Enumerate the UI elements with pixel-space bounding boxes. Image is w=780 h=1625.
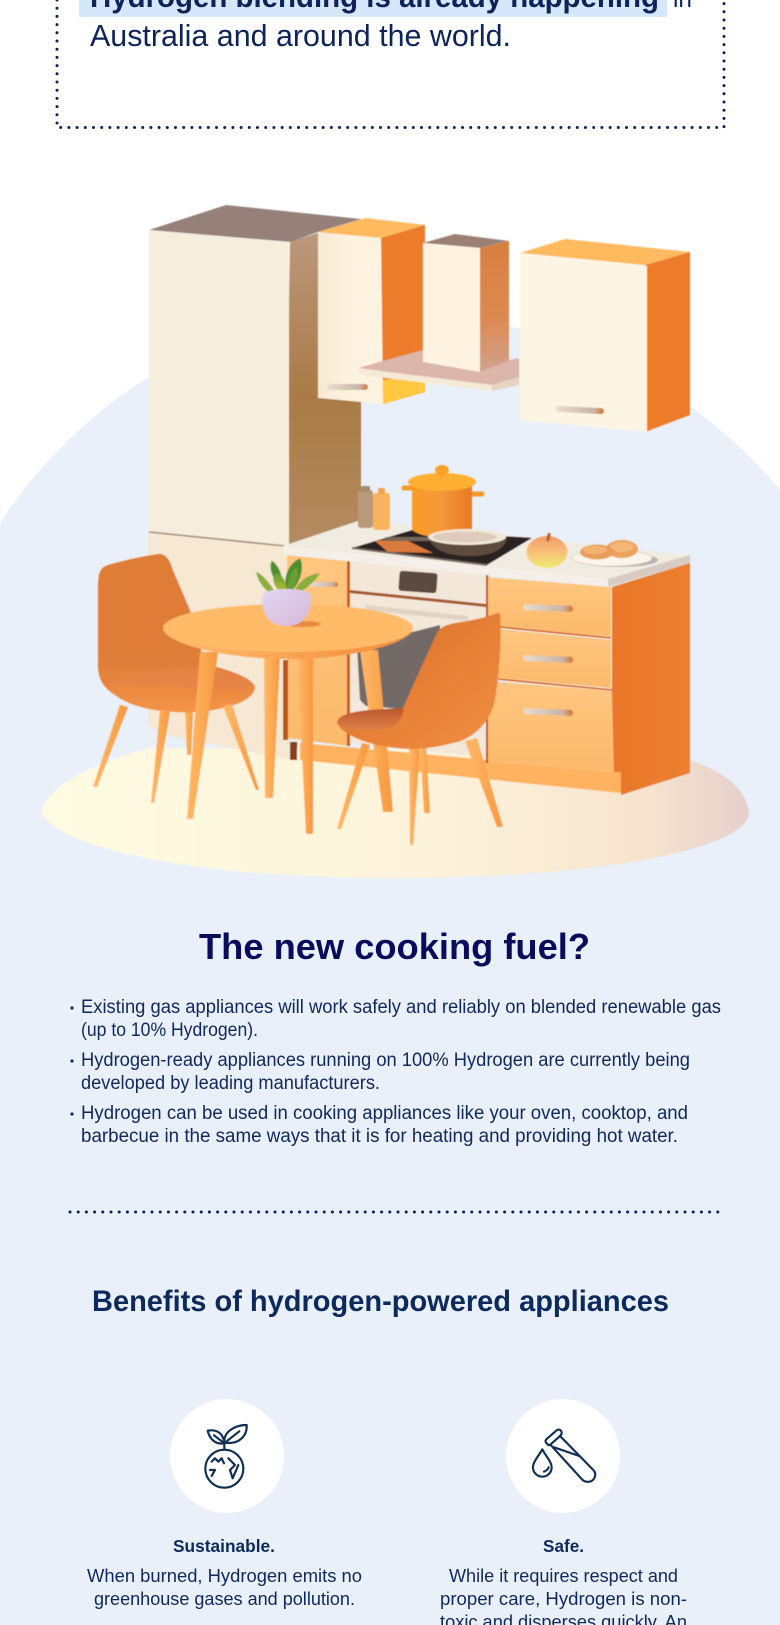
range hood [358, 234, 519, 391]
floor platform [41, 748, 749, 878]
bullet 1 [70, 997, 721, 1041]
bullet 2: Hydrogen-ready appliances running on 100% Hydrogen are currently being [81, 1050, 690, 1071]
left chair rear leg [185, 710, 193, 755]
fridge side [285, 219, 361, 546]
icon: sustainable plant and globe [170, 1399, 284, 1513]
salt and pepper shakers [358, 486, 390, 530]
kick base [300, 743, 621, 793]
bullet 2 [70, 1050, 690, 1094]
fridge lower section [148, 533, 292, 760]
bullet 3: barbecue in the same ways that it is for heating and providing hot water. [81, 1126, 678, 1147]
fridge upper door [149, 230, 289, 546]
left chair legs [93, 704, 259, 803]
text: safe: While it requires respect and [449, 1565, 678, 1586]
plate with buns [572, 540, 658, 567]
wall cabinet left [318, 218, 425, 404]
drawers [488, 577, 614, 773]
fridge top [149, 205, 361, 242]
left small cabinet [283, 552, 350, 760]
potted plant [256, 558, 321, 627]
base cabinet side [612, 563, 690, 795]
bullet 1: Existing gas appliances will work safely and reliably on blended renewable gas [81, 997, 721, 1018]
wall cabinet right [520, 239, 690, 432]
callout text second line: Australia and around the world. [90, 18, 511, 53]
table legs [187, 650, 393, 834]
table top [163, 604, 413, 659]
right chair [337, 613, 501, 749]
leaves [256, 558, 320, 596]
icon: safe test tube and drop [506, 1399, 620, 1513]
text block: bullet list [70, 997, 721, 1147]
text: sustainable: greenhouse gases and pollution. [94, 1588, 355, 1609]
right chair legs [337, 738, 503, 845]
bullet 3: Hydrogen can be used in cooking appliances like your oven, cooktop, and [81, 1103, 688, 1124]
callout highlight [79, 0, 667, 17]
illustration: kitchen [41, 205, 749, 878]
bullet 1: (up to 10% Hydrogen). [81, 1020, 258, 1041]
cooking pot [404, 465, 482, 538]
apple [526, 533, 568, 568]
text: safe [440, 1536, 687, 1625]
frying pan [385, 529, 507, 556]
heading: benefits: Benefits of hydrogen-powered appliances [92, 1285, 669, 1318]
text: sustainable [87, 1536, 362, 1609]
left chair [98, 554, 255, 712]
oven [350, 560, 488, 763]
text: sustainable: When burned, Hydrogen emits no [87, 1565, 362, 1586]
text: safe: Safe. [543, 1536, 584, 1556]
heading: the new cooking fuel: The new cooking fuel? [199, 926, 590, 967]
text: sustainable: Sustainable. [173, 1536, 275, 1556]
countertop [283, 520, 690, 587]
cooktop [352, 530, 532, 565]
bullet 3 [70, 1103, 688, 1147]
bullet 2: developed by leading manufacturers. [81, 1073, 380, 1094]
panel: dotted callout box [57, 0, 724, 128]
text: safe: proper care, Hydrogen is non- [440, 1588, 687, 1609]
